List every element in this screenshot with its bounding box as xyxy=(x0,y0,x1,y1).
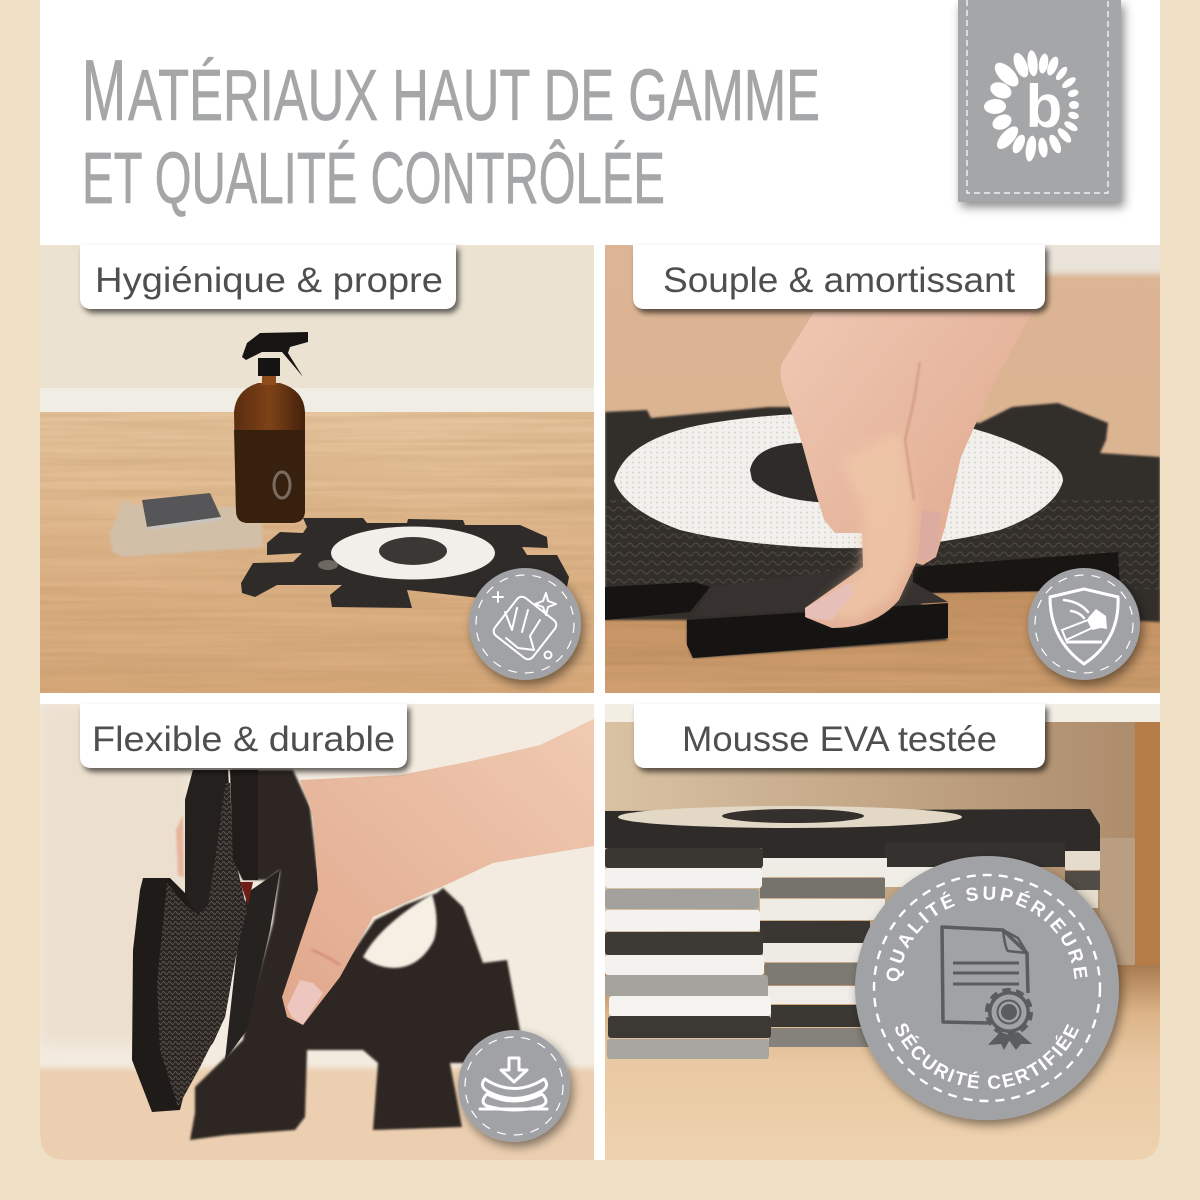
black mat xyxy=(605,403,1160,658)
second nail xyxy=(918,510,941,563)
centre hole xyxy=(750,443,819,502)
nail xyxy=(287,980,323,1025)
photo panel: hygiene xyxy=(40,245,594,693)
wall strip xyxy=(1045,245,1160,277)
baseboard xyxy=(40,388,594,412)
back right stack xyxy=(884,843,1100,908)
knuckle crease xyxy=(312,950,340,965)
back folded piece xyxy=(132,770,280,1112)
fingernail xyxy=(805,583,853,620)
spray bottle xyxy=(234,332,308,523)
red sliver xyxy=(240,882,253,905)
front tab side xyxy=(687,603,948,658)
top white band xyxy=(605,704,1160,722)
blurred background xyxy=(605,245,1160,590)
floor front xyxy=(605,590,1160,693)
certificate icon xyxy=(942,927,1032,1050)
white ring xyxy=(614,413,1063,548)
seal top text: QUALITÉ SUPÉRIEURE xyxy=(886,886,1088,982)
skirting xyxy=(1100,838,1145,966)
title xyxy=(82,43,820,219)
finger highlight xyxy=(815,430,915,620)
photo panel: flexible xyxy=(30,700,610,1168)
fingers behind xyxy=(176,815,184,878)
front left stack xyxy=(605,848,771,1059)
photo panel: EVA foam xyxy=(605,704,1160,1160)
flat mat and front piece xyxy=(190,770,522,1140)
seal bottom text: SÉCURITÉ CERTIFIÉE xyxy=(895,1023,1080,1089)
stacked mats xyxy=(605,806,1100,1059)
blurred floor xyxy=(30,1068,610,1168)
label: flexible xyxy=(80,704,407,768)
badge: hammer shield xyxy=(1028,568,1140,680)
badge: foam compression xyxy=(458,1030,570,1142)
wood post xyxy=(1135,722,1160,976)
front top edge xyxy=(230,770,258,880)
top mat xyxy=(605,809,1100,858)
photo panel: soft xyxy=(605,240,1170,693)
mat texture xyxy=(605,500,1160,590)
label: soft: Souple & amortissant xyxy=(663,261,1015,300)
textured underside xyxy=(157,783,247,1107)
label: flexible: Flexible & durable xyxy=(92,720,395,759)
top mat ring xyxy=(618,806,962,828)
top mat hole xyxy=(722,809,864,823)
label: hygiene: Hygiénique & propre xyxy=(95,261,443,300)
wood floor xyxy=(40,412,594,693)
label: foam: Mousse EVA testée xyxy=(682,720,997,759)
arm and hand xyxy=(282,716,600,1025)
blurred wall xyxy=(30,700,610,1080)
front tab top xyxy=(715,570,948,604)
title: ET QUALITÉ CONTRÔLÉE xyxy=(82,139,665,219)
cloth xyxy=(110,500,263,557)
wall xyxy=(40,245,594,390)
title: M xyxy=(82,43,126,139)
mat side left xyxy=(605,582,710,620)
quality seal xyxy=(852,856,1128,1132)
floor xyxy=(605,965,1160,1160)
centre stack xyxy=(760,858,887,1047)
mat side right xyxy=(913,552,1120,593)
blurred warm left xyxy=(40,704,190,1044)
wood grain xyxy=(40,412,594,693)
logo letter: b xyxy=(1026,73,1062,140)
label: hygiene xyxy=(80,245,456,309)
logo: sunflower b xyxy=(984,50,1080,162)
floor grain xyxy=(605,590,1160,693)
label: foam xyxy=(634,704,1045,768)
hand pressing mat xyxy=(781,312,1032,628)
wall xyxy=(605,722,1160,977)
label: soft xyxy=(633,245,1045,309)
badge: hand wipe xyxy=(469,568,581,680)
finger crease xyxy=(905,362,920,500)
mat hole showing wall xyxy=(363,894,437,968)
title: ATÉRIAUX HAUT DE GAMME xyxy=(128,56,820,136)
puzzle mat xyxy=(241,518,569,608)
sponge xyxy=(142,493,222,530)
brand tag xyxy=(958,0,1121,202)
inner foam strip xyxy=(225,870,280,1060)
foam edge strip xyxy=(185,770,228,915)
